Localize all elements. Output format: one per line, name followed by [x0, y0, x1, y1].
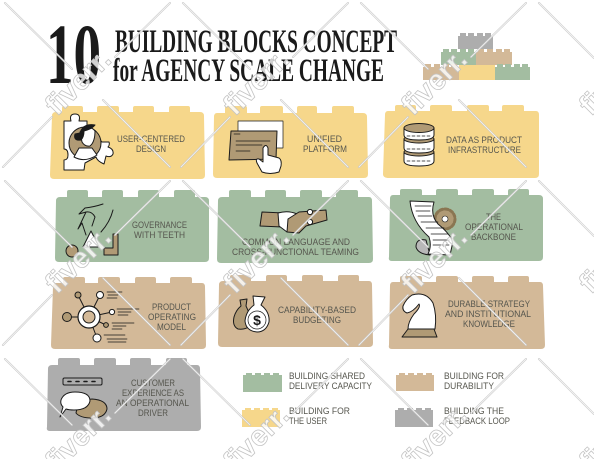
label: USER-CENTERED — [117, 134, 185, 144]
title: for AGENCY SCALE CHANGE — [113, 53, 384, 89]
label: COMMON LANGUAGE AND — [242, 237, 350, 247]
label — [445, 299, 531, 329]
label: GOVERNANCE — [132, 220, 187, 230]
label — [132, 220, 187, 240]
panel: common language and cross-functional teaming — [217, 190, 373, 263]
label: KNOWLEDGE — [463, 319, 515, 329]
legend: for durability: BUILDING FOR — [444, 371, 504, 381]
panel: data as product infrastructure — [383, 105, 539, 178]
watermark text: fiverr. — [39, 221, 118, 300]
title: BUILDING BLOCKS CONCEPT — [115, 24, 397, 60]
icon: hub and spokes — [62, 292, 139, 342]
label: DATA AS PRODUCT — [446, 135, 523, 145]
legend: feedback loop: BUILDING THE — [444, 406, 504, 416]
label — [232, 237, 359, 257]
watermark text: fiverr. — [39, 43, 118, 122]
label — [117, 134, 185, 154]
icon: brick pyramid — [423, 33, 530, 80]
label — [303, 134, 347, 154]
label: BUDGETING — [293, 315, 341, 325]
label: CAPABILITY-BASED — [278, 305, 356, 315]
legend: for durability: DURABILITY — [444, 381, 494, 391]
legend: for the user — [242, 406, 350, 427]
panel: customer experience — [47, 358, 201, 431]
panel: the operational backbone — [389, 189, 543, 261]
watermark text: fiverr. — [395, 221, 474, 300]
label — [278, 305, 356, 325]
panel: unified platform — [213, 106, 368, 178]
icon: hand placing shapes — [66, 204, 118, 257]
icon: rating and speech bubbles — [60, 378, 107, 418]
legend: shared delivery capacity: BUILDING SHARED — [289, 371, 365, 381]
label: PRODUCT — [152, 302, 192, 312]
legend: for the user: BUILDING FOR — [289, 406, 350, 416]
watermark text: fiverr. — [217, 43, 296, 122]
label — [116, 378, 189, 418]
label: AND INSTITUTIONAL — [445, 309, 531, 319]
panel: user-centered design — [50, 106, 205, 179]
label — [446, 135, 523, 155]
label: MODEL — [157, 322, 186, 332]
title: 10 — [46, 6, 101, 102]
label: INFRASTRUCTURE — [448, 145, 521, 155]
icon: scroll and gear — [410, 201, 455, 255]
label: EXPERIENCE AS — [122, 388, 184, 398]
panel: durable strategy and institutional knowledge — [389, 276, 545, 349]
label: DRIVER — [138, 408, 168, 418]
icon: browser windows and pointing hand — [229, 121, 283, 174]
legend: feedback loop — [395, 406, 510, 427]
label: BACKBONE — [471, 232, 516, 242]
icon: puzzle with person — [64, 114, 113, 170]
label: DESIGN — [136, 144, 166, 154]
icon: money bags — [234, 296, 269, 332]
legend: shared delivery capacity — [243, 371, 372, 392]
legend: shared delivery capacity: DELIVERY CAPACITY — [289, 381, 372, 391]
legend: for the user: THE USER — [289, 416, 327, 426]
label: AN OPERATIONAL — [116, 398, 189, 408]
watermark text: fiverr. — [217, 221, 296, 300]
icon: chess knight — [402, 294, 437, 337]
label: THE — [486, 212, 501, 222]
label: OPERATIONAL — [465, 222, 523, 232]
legend: for durability — [396, 371, 504, 391]
label: UNIFIED — [307, 134, 342, 144]
panel: governance with teeth — [55, 190, 209, 262]
label — [148, 302, 196, 332]
label: DURABLE STRATEGY — [448, 299, 530, 309]
label — [465, 212, 523, 242]
icon: handshake — [260, 209, 327, 233]
label: PLATFORM — [303, 144, 347, 154]
icon: money bags: $ — [253, 312, 261, 328]
label: WITH TEETH — [134, 230, 185, 240]
panel: capability-based budgeting — [218, 275, 373, 347]
icon: database — [404, 124, 434, 166]
label: OPERATING — [148, 312, 196, 322]
title — [46, 6, 397, 102]
watermark text: fiverr. — [395, 43, 474, 122]
legend: feedback loop: FEEDBACK LOOP — [444, 416, 510, 426]
label: CROSS-FUNCTIONAL TEAMING — [232, 247, 359, 257]
panel: product operating model — [51, 277, 206, 349]
label: CUSTOMER — [131, 378, 175, 388]
